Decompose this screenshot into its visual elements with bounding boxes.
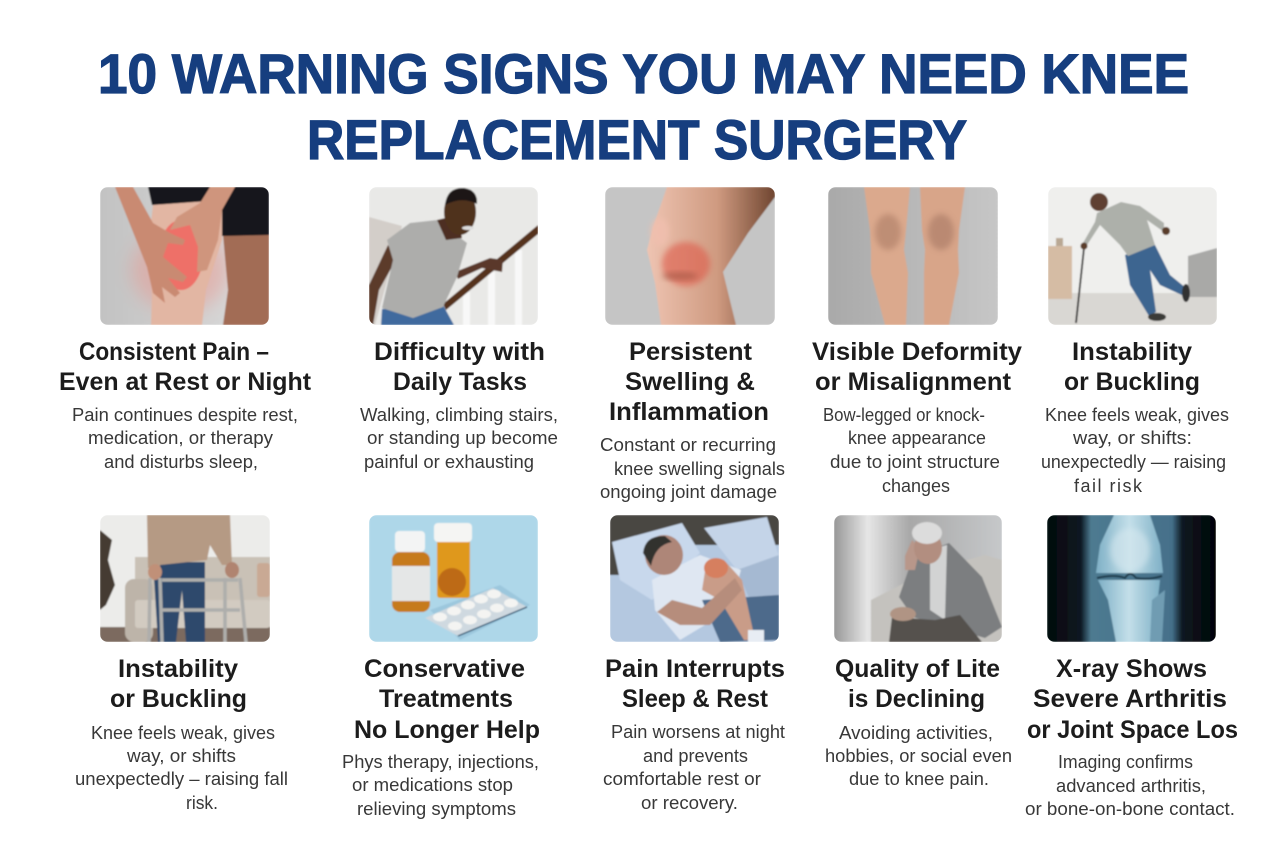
heading: No Longer Help bbox=[354, 716, 540, 744]
description: or medications stop bbox=[352, 775, 513, 795]
description bbox=[825, 723, 1012, 789]
description bbox=[823, 405, 1000, 496]
heading: Persistent bbox=[629, 338, 753, 366]
heading bbox=[374, 338, 545, 396]
panel: instability with walker bbox=[75, 515, 288, 813]
description bbox=[603, 722, 785, 813]
description: or recovery. bbox=[641, 793, 738, 813]
description: hobbies, or social even bbox=[825, 746, 1012, 766]
description: fail risk bbox=[1074, 476, 1143, 496]
heading: Conservative bbox=[364, 655, 525, 683]
description: ongoing joint damage bbox=[600, 482, 777, 502]
description: medication, or therapy bbox=[88, 428, 273, 448]
description: painful or exhausting bbox=[364, 452, 534, 472]
description: due to knee pain. bbox=[849, 769, 989, 789]
heading bbox=[605, 655, 785, 713]
heading: or Buckling bbox=[1064, 368, 1200, 396]
description bbox=[342, 752, 539, 819]
description: Knee feels weak, gives bbox=[1045, 405, 1229, 425]
description: Pain worsens at night bbox=[611, 722, 785, 742]
description: and disturbs sleep, bbox=[104, 452, 258, 472]
heading: Instability bbox=[1072, 338, 1192, 366]
photo: pill bottles and blister pack bbox=[369, 515, 538, 642]
description: or standing up become bbox=[367, 428, 558, 448]
panel: consistent pain bbox=[59, 187, 312, 472]
heading bbox=[1064, 338, 1200, 396]
description bbox=[1025, 752, 1235, 819]
heading bbox=[835, 655, 1000, 713]
photo: person using a walker bbox=[100, 515, 270, 642]
panel: instability with cane bbox=[1041, 187, 1229, 496]
panel: deformity bbox=[812, 187, 1022, 496]
description: Phys therapy, injections, bbox=[342, 752, 539, 772]
description bbox=[75, 723, 288, 813]
panel: x-ray bbox=[1025, 515, 1238, 819]
photo: man in bed holding his knee bbox=[610, 515, 779, 642]
description: unexpectedly — raising bbox=[1041, 452, 1226, 472]
photo: older man sitting with head in hand bbox=[834, 515, 1002, 642]
photo: swollen red knee side view bbox=[605, 187, 775, 325]
heading: Severe Arthritis bbox=[1033, 685, 1227, 713]
description: way, or shifts bbox=[126, 746, 236, 766]
heading: Daily Tasks bbox=[393, 368, 527, 396]
heading: Inflammation bbox=[609, 398, 769, 426]
description: unexpectedly – raising fall bbox=[75, 769, 288, 789]
heading: Instability bbox=[118, 655, 238, 683]
description: and prevents bbox=[643, 746, 748, 766]
heading bbox=[812, 338, 1022, 396]
description: or bone-on-bone contact. bbox=[1025, 799, 1235, 819]
heading: Swelling & bbox=[625, 368, 755, 396]
title: 10 WARNING SIGNS YOU MAY NEED KNEE bbox=[98, 43, 1189, 105]
title: REPLACEMENT SURGERY bbox=[307, 109, 967, 171]
heading bbox=[609, 338, 769, 426]
panel: swelling bbox=[600, 187, 785, 502]
panel: quality of life bbox=[825, 515, 1012, 789]
photo: man struggling on stairs bbox=[369, 187, 538, 325]
description: changes bbox=[882, 476, 950, 496]
heading: Even at Rest or Night bbox=[59, 368, 312, 396]
heading: Difficulty with bbox=[374, 338, 545, 366]
description: way, or shifts: bbox=[1072, 428, 1192, 448]
panel: conservative treatments bbox=[342, 515, 540, 819]
photo: bow-legged knees from the front bbox=[828, 187, 998, 325]
photo: man stumbling with a cane bbox=[1048, 187, 1217, 325]
heading: Consistent Pain – bbox=[79, 338, 269, 366]
description: risk. bbox=[186, 793, 218, 813]
description: comfortable rest or bbox=[603, 769, 761, 789]
description bbox=[1041, 405, 1229, 496]
panel: daily tasks bbox=[360, 187, 558, 472]
heading: Pain Interrupts bbox=[605, 655, 785, 683]
description: Imaging confirms bbox=[1058, 752, 1193, 772]
description bbox=[600, 435, 785, 502]
description: Walking, climbing stairs, bbox=[360, 405, 558, 425]
description: knee swelling signals bbox=[614, 459, 785, 479]
heading bbox=[59, 338, 312, 396]
heading: or Joint Space Los bbox=[1027, 716, 1238, 744]
description: knee appearance bbox=[848, 428, 986, 448]
description bbox=[72, 405, 298, 472]
photo: hands holding a red painful knee bbox=[100, 187, 269, 325]
description: Bow-legged or knock- bbox=[823, 405, 985, 425]
heading: or Misalignment bbox=[815, 368, 1012, 396]
heading: Treatments bbox=[379, 685, 513, 713]
description: advanced arthritis, bbox=[1056, 776, 1206, 796]
heading: Sleep & Rest bbox=[622, 685, 769, 713]
panel: sleep bbox=[603, 515, 785, 813]
description: Knee feels weak, gives bbox=[91, 723, 275, 743]
heading bbox=[354, 655, 540, 744]
title bbox=[98, 43, 1189, 171]
heading: is Declining bbox=[848, 685, 985, 713]
description: relieving symptoms bbox=[357, 799, 516, 819]
description: Constant or recurring bbox=[600, 435, 776, 455]
heading bbox=[1027, 655, 1238, 744]
heading: Visible Deformity bbox=[812, 338, 1022, 366]
heading: Quality of Lite bbox=[835, 655, 1000, 683]
description: due to joint structure bbox=[830, 452, 1000, 472]
heading bbox=[110, 655, 247, 713]
description: Pain continues despite rest, bbox=[72, 405, 298, 425]
heading: X-ray Shows bbox=[1056, 655, 1207, 683]
description: Avoiding activities, bbox=[839, 723, 993, 743]
heading: or Buckling bbox=[110, 685, 247, 713]
description bbox=[360, 405, 558, 472]
photo: knee x-ray bbox=[1047, 515, 1216, 642]
